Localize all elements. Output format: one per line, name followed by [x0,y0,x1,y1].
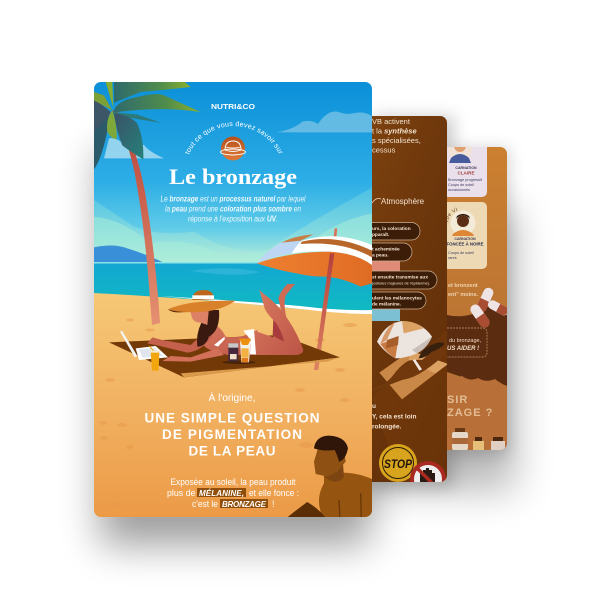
legs and bikini [243,284,303,355]
sky [94,82,372,264]
panel: carnation foncée à noire: CARNATION [454,237,476,241]
pills: process steps: ulent les mélanocytes [372,296,422,302]
text: synthèse: t la synthèse [372,126,417,136]
sunscreen products [222,339,256,364]
intro text: Le bronzage est un processus naturel par lequel [160,194,306,204]
headline: DE LA PEAU [188,444,276,458]
headline: UNE SIMPLE QUESTION [144,410,320,426]
dark hill [447,305,507,392]
callout: nous aider: du bronzage, [449,338,482,344]
illustration: woman sunbathing [109,284,340,377]
drop shadow [100,116,515,545]
text: bronzent moins: ent" moins. [448,292,479,298]
laptop [120,331,137,357]
text: prolongée: rolongée. [372,424,401,430]
heading: choisir bronzage [447,396,492,416]
text: prolongée: u [372,403,376,410]
illustration: palm tree [94,81,201,325]
sand [94,293,372,517]
conclusion text: plus de [167,488,195,498]
text: prolongée [372,403,416,430]
face [190,311,209,325]
sand area [460,376,507,450]
illustration: man in foreground [284,436,374,520]
sea [94,264,372,310]
back card: skin types [447,147,507,450]
arms [148,336,212,353]
pills: process steps: pparaît. [372,232,389,238]
pills: process steps: urs, la coloration [372,226,411,232]
intro text: la peau prend une coloration plus sombre en [165,204,301,214]
text: bronzent moins [448,283,478,296]
logo: NUTRI&CO [211,102,255,111]
sand texture [99,318,357,449]
illustration: beach umbrella [257,228,372,370]
heading: choisir bronzage: ZAGE ? [447,407,493,419]
pills: process steps: st ensuite transmise aux [372,274,428,280]
icon: stop sign [379,444,417,482]
icon: forbidden hand [410,461,446,482]
text: prolongée: Y, cela est loin [372,414,416,420]
callout: nous aider [447,328,488,358]
conclusion text: ! [272,499,274,509]
hair [197,310,219,347]
panel: carnation foncée à noire: totype VI [447,208,458,224]
panel: carnation foncée à noire: FONCÉE À NOIRE [446,242,484,246]
text: synthèse: cessus [372,146,396,154]
pills: process steps: t acheminée [372,246,400,252]
headline [144,410,320,458]
conclusion text: MÉLANINE, [199,489,244,498]
pills: process steps: (cellules majeures de l'épiderme). [372,280,430,286]
conclusion text: Exposée au soleil, la peau produit [170,477,296,487]
conclusion text: c'est le [192,499,218,509]
panel: carnation claire: Bronzage progressif [448,178,483,182]
text: synthèse [372,117,421,154]
skin layer band [372,261,400,271]
intro text [160,194,306,224]
middle card: sun and melanin [372,116,447,482]
sun rays [402,335,447,482]
heading: choisir bronzage: SIR [447,394,468,406]
callout: nous aider: US AIDER ! [447,346,479,352]
panel: carnation claire: Coups de soleil [448,183,474,187]
title: Le bronzage [169,164,297,189]
text: bronzent moins: et bronzent [448,283,478,289]
intro text: réponse à l'exposition aux UV. [188,214,278,224]
text: synthèse: s spécialisées, [372,136,421,145]
icon: capsules [470,288,507,328]
conclusion text: BRONZAGE [222,500,267,509]
panel: carnation foncée à noire: rares [448,256,457,260]
front card: le bronzage [94,82,372,517]
conclusion text: et elle fonce : [249,488,299,498]
clouds and hills [94,111,374,263]
pills: process steps: de mélanine. [372,302,401,308]
icon: sun hat [220,136,246,160]
drink [151,352,159,371]
icon: product jars [452,428,505,450]
panel: carnation foncée à noire: Coups de soleil [448,251,474,255]
hat [168,301,236,312]
illustration: woman on towel [372,321,448,399]
headline: DE PIGMENTATION [162,427,302,442]
curved tagline: tout ce que vous devez savoir sur [185,121,282,154]
icon: stop sign: STOP [384,457,413,471]
label: atmosphère: Atmosphère [381,197,425,206]
panel: carnation claire [447,147,487,197]
conclusion text [167,477,299,509]
torso [204,326,258,355]
pills: process steps: a peau. [372,254,389,258]
panel: carnation claire: occasionnels [448,188,470,192]
text: synthèse: VB activent [372,117,411,126]
panel: carnation foncée à noire [447,202,487,269]
subheading: À l'origine, [208,391,256,404]
panel: carnation claire: CARNATION [455,166,477,170]
panel: carnation claire: CLAIRE [457,170,475,176]
pills: process steps [372,222,438,310]
